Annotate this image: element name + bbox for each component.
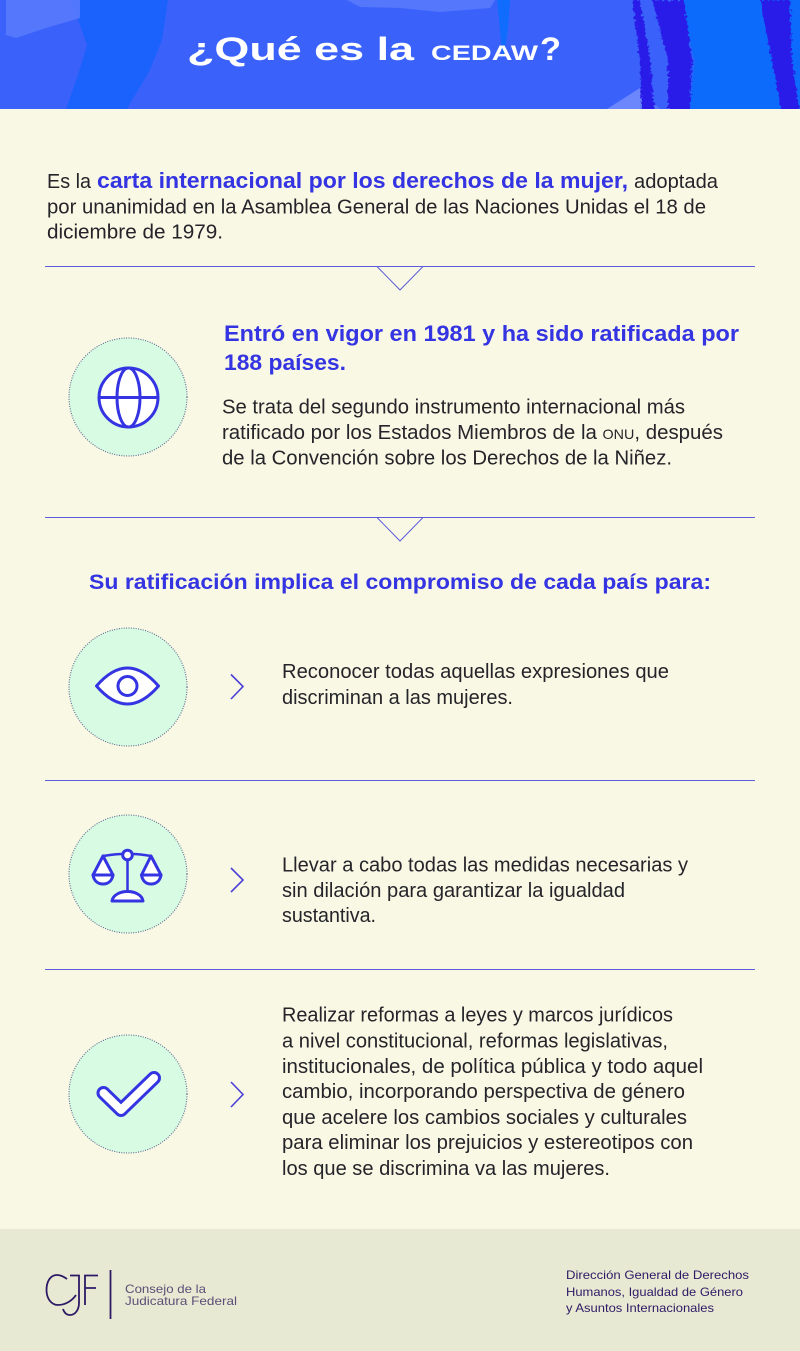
title [187,31,561,67]
intro text block: adoptada [634,171,719,193]
text block: para eliminar los prejuicios y estereotipos con [282,1132,693,1154]
intro text block [47,168,719,244]
arrow [231,674,243,699]
arrow [231,1082,243,1107]
heading: entry into force [224,321,739,375]
intro text block: Es la [47,171,92,193]
text block: directorate: y Asuntos Internacionales [566,1301,714,1315]
panel: reforms [69,1004,703,1180]
text block: directorate: Dirección General de Derechos [566,1268,749,1282]
footer band [0,1229,800,1351]
text block [282,1004,703,1180]
text block: Llevar a cabo todas las medidas necesarias y [282,854,688,876]
text block: discriminan a las mujeres. [282,687,513,709]
heading: entry into force: Entró en vigor en 1981 y ha sido ratificada por [224,321,739,346]
text block: sustantiva. [282,905,376,927]
title: CEDAW [431,42,538,65]
text block: que acelere los cambios sociales y culturales [282,1107,687,1129]
text block: a nivel constitucional, reformas legislativas, [282,1030,668,1052]
arrow [231,868,243,892]
text block: second most ratified [222,396,723,470]
logo: Consejo de la [125,1282,206,1296]
logo [46,1270,237,1319]
header banner [0,0,800,115]
text block: second most ratified: Se trata del segundo instrumento internacional más [222,396,685,418]
panel: measures [69,815,688,933]
icon: check mark [69,1035,187,1153]
icon: globe [69,338,187,456]
title: ¿Qué es la [187,31,414,67]
text block [282,854,688,927]
panel: entry into force [69,321,739,470]
title: ? [540,31,561,67]
panel: recognize [69,628,669,746]
text block: sin dilación para garantizar la igualdad [282,880,625,902]
logo: Judicatura Federal [125,1294,237,1308]
intro text block: carta internacional por los derechos de la mujer, [97,168,628,193]
text block: second most ratified: ratificado por los Estados Miembros de la ONU, después [222,422,723,444]
text block: second most ratified: de la Convención sobre los Derechos de la Niñez. [222,448,672,470]
text block: los que se discrimina va las mujeres. [282,1158,610,1180]
text block: institucionales, de política pública y todo aquel [282,1056,703,1078]
text block: cambio, incorporando perspectiva de género [282,1081,685,1103]
text block: Realizar reformas a leyes y marcos jurídicos [282,1004,673,1026]
icon: scales [69,815,187,933]
heading: commitment: Su ratificación implica el compromiso de cada país para: [89,571,711,594]
text block [282,661,669,709]
text block: directorate [566,1268,749,1315]
icon: eye [69,628,187,746]
text block: Reconocer todas aquellas expresiones que [282,661,669,683]
text block: directorate: Humanos, Igualdad de Género [566,1285,743,1299]
intro text block: por unanimidad en la Asamblea General de las Naciones Unidas el 18 de [47,196,706,218]
heading: entry into force: 188 países. [224,350,346,375]
intro text block: diciembre de 1979. [47,222,223,244]
